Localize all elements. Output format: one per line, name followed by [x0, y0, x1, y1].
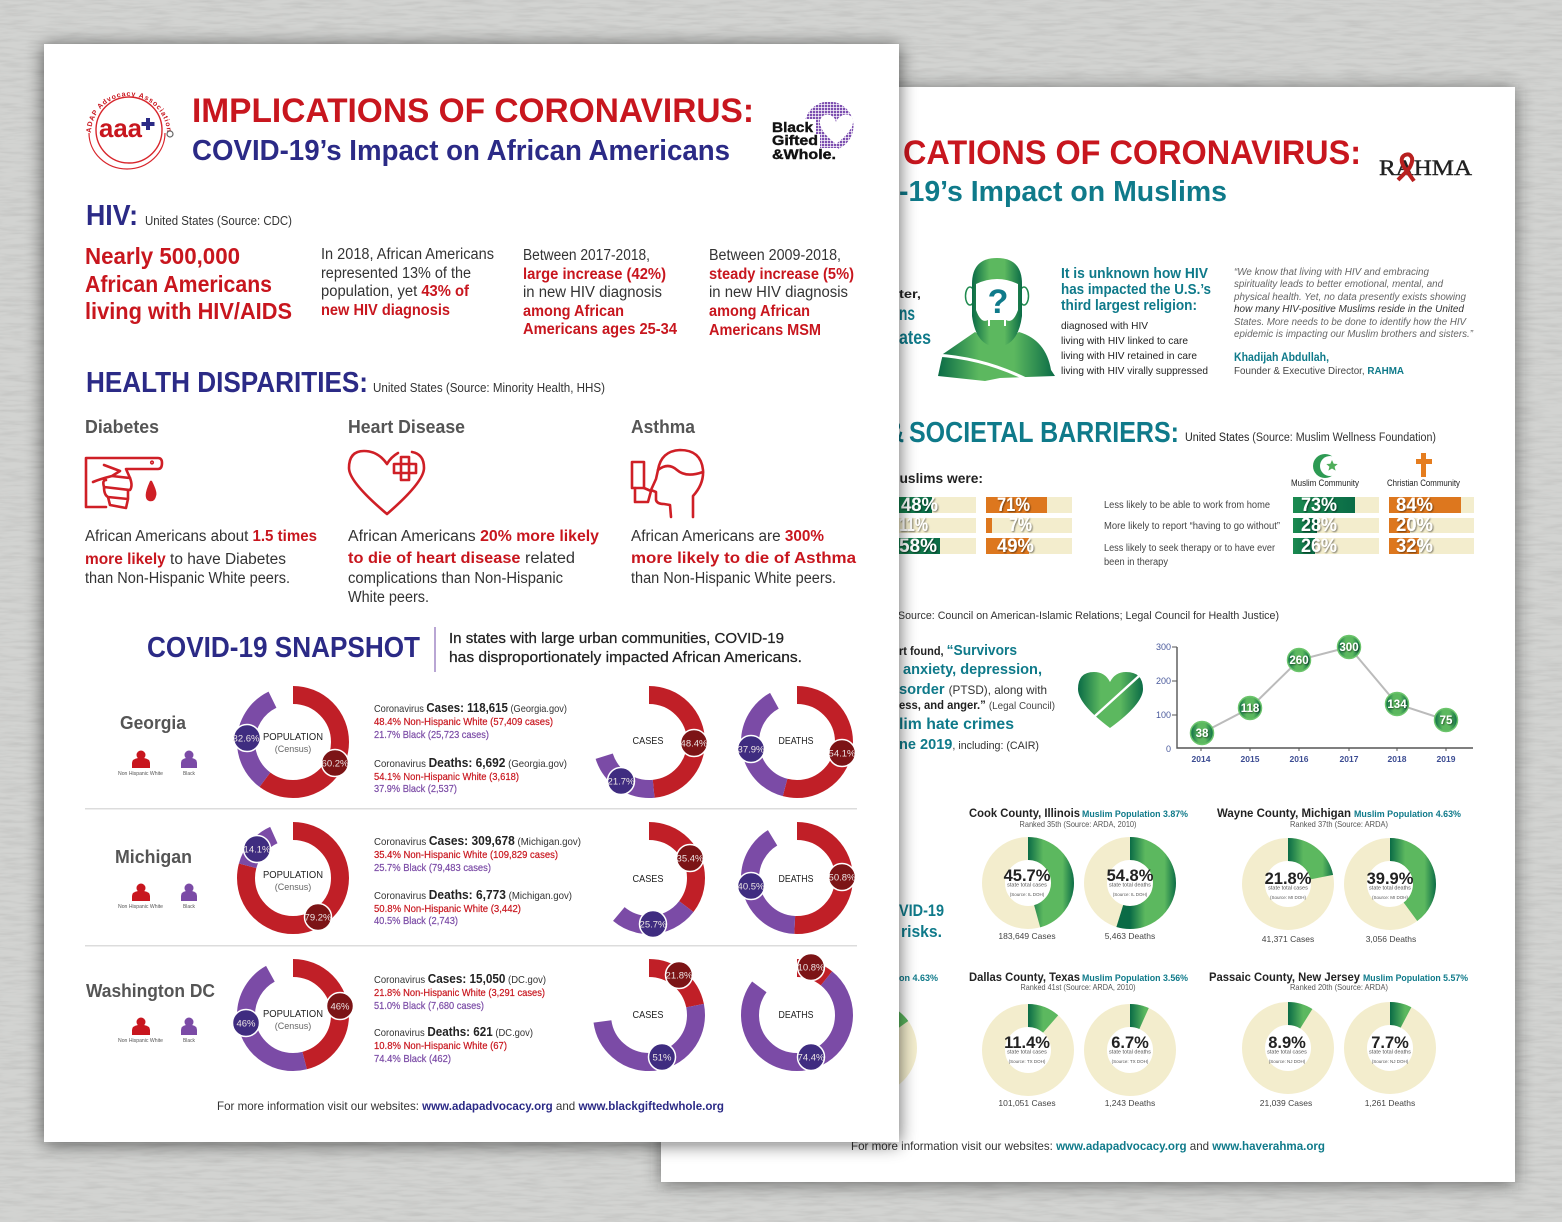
line chart: hate crimes by year: 2015 — [1241, 754, 1260, 764]
donut: deaths 7.7% — [1356, 1014, 1424, 1108]
donut: deaths 54.8%: 54.8% — [1107, 867, 1154, 885]
state name and legend: Black — [183, 904, 195, 910]
text: hate crimes report: lim hate crimes — [899, 716, 1014, 733]
bar labels — [1104, 500, 1280, 568]
line chart: hate crimes by year: 200 — [1156, 676, 1171, 686]
panel: heart disease — [348, 417, 599, 606]
bar chart: Muslim and Christian community bars: 20% — [1396, 515, 1433, 536]
line chart: hate crimes by year — [1156, 636, 1473, 764]
donut: deaths 54.8%: state total deaths — [1109, 882, 1151, 888]
county panel: Cook County, Illinois: Muslim Population 3.87% — [1082, 809, 1189, 820]
donut: deaths: 10.8% — [798, 962, 825, 974]
donut: cases — [602, 695, 708, 794]
icon: person with question mark: ? — [988, 283, 1008, 321]
state name and legend: Non Hispanic White — [118, 904, 163, 910]
text: large increase: Between 2017-2018, — [523, 247, 650, 264]
donut: cases 11.4%: 11.4% — [1004, 1034, 1050, 1052]
heading: HIV: United States (Source: CDC) — [145, 214, 292, 228]
county panel: Dallas County, Texas: Dallas County, Texas — [969, 970, 1080, 984]
text: steady increase: among African — [709, 303, 810, 320]
donut: cases 21.8%: state total cases — [1268, 886, 1308, 892]
logo: ADAP Advocacy Association: aaa — [99, 113, 143, 143]
panel: heart disease: to die of heart disease related — [348, 550, 575, 567]
line chart: hate crimes by year: 2018 — [1388, 754, 1407, 764]
back page footer: For more information visit our websites: www.adapadvocacy.org and www.haverahma.org — [851, 1139, 1325, 1153]
stats text: 51.0% Black (7,680 cases) — [374, 1000, 484, 1012]
quote attribution — [1234, 350, 1404, 377]
county panel: Passaic County, New Jersey: Passaic County, New Jersey — [1209, 970, 1360, 984]
panel: diabetes: more likely to have Diabetes — [85, 551, 286, 568]
heading: COVID-19 snapshot: In states with large urban communities, COVID-19 — [449, 631, 784, 647]
county panel: Dallas County, Texas — [969, 970, 1189, 1108]
subheading: Muslims were: Muslims were: — [888, 470, 983, 486]
text: hate crimes report: ess, and anger.” (Legal Council) — [899, 698, 1055, 712]
text: unknown impact list: diagnosed with HIV — [1061, 320, 1148, 332]
donut: cases 11.4%: 101,051 Cases — [998, 1098, 1056, 1108]
county panel: Passaic County, New Jersey — [1209, 970, 1468, 1108]
panel: heart disease: complications than Non-Hispanic — [348, 570, 563, 587]
logo: Black Gifted & Whole — [770, 102, 854, 162]
text: steady increase — [709, 247, 854, 339]
donut: cases 45.7%: (Source: IL DOH) — [1010, 892, 1045, 897]
bar labels: been in therapy — [1104, 557, 1168, 568]
text fragment: COVID-19 risks: risks. — [901, 922, 942, 941]
bar chart: left comparison bars: 11% — [899, 515, 928, 536]
donut: cases 11.4%: state total cases — [1007, 1050, 1047, 1056]
text fragment: left column: ns — [899, 304, 915, 325]
quote block: “We know that living with HIV and embracing — [1234, 267, 1429, 278]
donut: deaths: DEATHS — [778, 874, 814, 885]
text: unknown impact list: living with HIV linked to care — [1061, 335, 1188, 347]
text: hate crimes report: sorder (PTSD), along with — [899, 681, 1047, 698]
logo: Black Gifted & Whole: Gifted — [772, 132, 818, 148]
donut: cases 8.9%: 21,039 Cases — [1260, 1098, 1312, 1108]
donut: population — [244, 831, 340, 930]
stats text: 54.1% Non-Hispanic White (3,618) — [374, 771, 519, 783]
text: unknown impact list: third largest religion: — [1061, 297, 1197, 314]
stats text — [374, 700, 567, 795]
donut: cases: CASES — [632, 1010, 664, 1021]
bar chart: Muslim and Christian community bars — [1293, 495, 1474, 557]
text: steady increase: Between 2009-2018, — [709, 247, 841, 264]
text: steady increase: in new HIV diagnosis — [709, 284, 848, 301]
icon: finger prick and blood drop — [86, 458, 162, 508]
panel: diabetes — [85, 417, 317, 587]
county panel: Passaic County, New Jersey: Ranked 20th (Source: ARDA) — [1290, 982, 1388, 992]
line chart: hate crimes by year: 300 — [1339, 642, 1359, 654]
state name and legend: Michigan — [115, 847, 192, 867]
stats text: Coronavirus Cases: 118,615 (Georgia.gov) — [374, 700, 567, 715]
bar labels: Less likely to be able to work from home — [1104, 500, 1270, 511]
icon: crescent and star, Muslim community: Muslim Community — [1291, 478, 1359, 489]
donut: cases 8.9%: state total cases — [1267, 1050, 1307, 1056]
partial county donut — [836, 973, 939, 1082]
logo: Black Gifted & Whole: &Whole. — [772, 146, 836, 162]
icon: broken green heart — [1078, 672, 1143, 728]
state name and legend: Georgia — [120, 713, 187, 733]
donut: deaths 6.7% — [1096, 1016, 1164, 1108]
stat: nearly 500,000: Nearly 500,000 — [85, 243, 240, 269]
donut: deaths — [738, 695, 856, 789]
text: large increase — [523, 247, 677, 338]
icon: heart with medical cross — [349, 451, 424, 514]
donut: deaths 39.9%: state total deaths — [1369, 886, 1411, 892]
logo: ADAP Advocacy Association — [86, 92, 174, 170]
panel: asthma: than Non-Hispanic White peers. — [631, 570, 836, 587]
donut: cases — [602, 831, 704, 938]
row: Michigan — [115, 831, 856, 938]
panel: asthma: Asthma — [631, 417, 696, 437]
panel: heart disease: African Americans 20% more likely — [348, 528, 599, 545]
donut: cases 21.8%: 21.8% — [1265, 870, 1312, 888]
heading: COVID-19 snapshot — [147, 627, 802, 672]
logo: Black Gifted & Whole: Black — [772, 119, 813, 135]
stats text: 48.4% Non-Hispanic White (57,409 cases) — [374, 716, 553, 728]
quote block: spirituality leads to better emotional, mental, and — [1234, 279, 1443, 290]
icon: cross, Christian community: Christian Community — [1387, 478, 1460, 489]
bar chart: Muslim and Christian community bars: 73% — [1301, 495, 1337, 516]
text: hate crimes report: anxiety, depression, — [903, 661, 1042, 678]
quote block: States. More needs to be done to identify how the HIV — [1234, 317, 1467, 328]
stats text: 35.4% Non-Hispanic White (109,829 cases) — [374, 849, 558, 861]
text fragment: COVID-19 risks: VID-19 — [899, 901, 944, 920]
panel: diabetes: than Non-Hispanic White peers. — [85, 570, 290, 587]
stats text: Coronavirus Deaths: 621 (DC.gov) — [374, 1024, 533, 1039]
bar chart: left comparison bars: 48% — [901, 495, 938, 516]
quote block — [1233, 267, 1474, 340]
text: unknown impact list: has impacted the U.S.’s — [1061, 281, 1211, 298]
heading: health disparities — [86, 367, 605, 399]
quote block: how many HIV-positive Muslims reside in the United — [1234, 304, 1464, 315]
donut: cases: 21.7% — [608, 776, 635, 788]
county panel: Wayne County, Michigan — [1217, 806, 1462, 944]
back title: -19’s Impact on Muslims — [899, 176, 1227, 208]
panel: heart disease: Heart Disease — [348, 417, 465, 437]
stats text: 25.7% Black (79,483 cases) — [374, 862, 491, 874]
donut: deaths: DEATHS — [778, 736, 814, 747]
donut: cases 8.9% — [1254, 1014, 1322, 1108]
stats text: Coronavirus Cases: 309,678 (Michigan.gov) — [374, 833, 581, 848]
heading: societal barriers — [889, 417, 1436, 449]
donut: population: (Census) — [275, 744, 311, 754]
donut: population: POPULATION — [263, 870, 323, 881]
text: 13% of population: new HIV diagnosis — [321, 302, 450, 319]
stats text: 21.7% Black (25,723 cases) — [374, 729, 489, 741]
stats text: Coronavirus Deaths: 6,773 (Michigan.gov) — [374, 887, 572, 902]
line chart: hate crimes by year: 300 — [1156, 642, 1171, 652]
donut: population: 79.2% — [305, 912, 332, 924]
front page footer: For more information visit our websites: www.adapadvocacy.org and www.blackgiftedwhole.org — [217, 1099, 724, 1113]
text: large increase: among African — [523, 303, 624, 320]
text: unknown impact list: living with HIV virally suppressed — [1061, 365, 1208, 377]
heading: COVID-19 snapshot: has disproportionately impacted African Americans. — [449, 650, 802, 666]
bar chart: left comparison bars — [880, 495, 1072, 557]
donut: cases: CASES — [632, 874, 664, 885]
donut: deaths: DEATHS — [778, 1010, 814, 1021]
county panel: Wayne County, Michigan: Wayne County, Michigan — [1217, 806, 1351, 820]
text: 13% of population — [321, 246, 494, 319]
quote block: epidemic is impacting our Muslim brothers and sisters.” — [1234, 329, 1474, 340]
donut: cases: 25.7% — [640, 920, 667, 930]
donut: deaths 7.7%: 1,261 Deaths — [1365, 1098, 1415, 1108]
state name and legend: Black — [183, 1038, 195, 1044]
donut: population: 60.2% — [322, 758, 349, 770]
line chart: hate crimes by year: 0 — [1166, 744, 1171, 754]
quote block: physical health. Yet, no data presently exists showing — [1233, 292, 1466, 303]
donut: population: 46% — [236, 1018, 256, 1030]
donut: deaths 54.8%: 5,463 Deaths — [1105, 931, 1155, 941]
donut: cases: 35.4% — [677, 854, 704, 864]
line chart: hate crimes by year: 2014 — [1192, 754, 1211, 764]
county panel: Cook County, Illinois: Cook County, Illinois — [969, 806, 1080, 820]
stats text: 37.9% Black (2,537) — [374, 783, 457, 795]
panel: asthma — [631, 417, 856, 587]
bar chart: Muslim and Christian community bars: 28% — [1301, 515, 1337, 536]
stats text: 10.8% Non-Hispanic White (67) — [374, 1040, 507, 1052]
heading: societal barriers: & — [889, 417, 904, 449]
text: steady increase: steady increase (5%) — [709, 266, 854, 283]
panel: back page, impact on Muslims — [661, 87, 1515, 1184]
county panel: Dallas County, Texas: Muslim Population 3.56% — [1082, 973, 1189, 984]
donut: deaths 39.9%: 3,056 Deaths — [1366, 934, 1416, 944]
bar chart: left comparison bars: 58% — [899, 536, 937, 557]
donut: population — [232, 968, 354, 1062]
donut: cases: CASES — [632, 736, 664, 747]
donut: cases 45.7% — [994, 848, 1062, 941]
title: COVID-19’s Impact on African Americans — [192, 135, 730, 167]
donut: deaths: 74.4% — [798, 1052, 825, 1064]
text: large increase: in new HIV diagnosis — [523, 284, 662, 301]
text fragment: left column — [899, 289, 931, 349]
heading: societal barriers: United States (Source: Muslim Wellness Foundation) — [1185, 432, 1436, 444]
state name and legend — [86, 981, 215, 1044]
text: large increase: Americans ages 25-34 — [523, 321, 677, 338]
donut: cases 45.7%: state total cases — [1007, 882, 1047, 888]
logo: ADAP Advocacy Association: ADAP Advocacy Association — [86, 92, 171, 133]
donut: cases 21.8%: (Source: MI DOH) — [1270, 895, 1306, 900]
donut: cases 11.4% — [994, 1016, 1062, 1108]
donut: cases — [602, 962, 696, 1070]
donut: cases 21.8%: 41,371 Cases — [1262, 934, 1314, 944]
back title: CATIONS OF CORONAVIRUS: — [903, 134, 1361, 172]
donut: population: 46% — [330, 1002, 350, 1012]
stat: nearly 500,000 — [85, 243, 292, 324]
donut: deaths 54.8%: (Source: IL DOH) — [1113, 892, 1148, 897]
bar chart: Muslim and Christian community bars: 26% — [1301, 536, 1337, 557]
donut: deaths 6.7%: 6.7% — [1111, 1034, 1149, 1052]
line chart: hate crimes by year: 2019 — [1437, 754, 1456, 764]
heading: HIV: HIV: — [86, 200, 138, 232]
donut: cases 8.9%: (Source: NJ DOH) — [1269, 1059, 1306, 1064]
heading: HIV — [86, 200, 292, 232]
bar labels: Less likely to seek therapy or to have ever — [1104, 543, 1276, 554]
panel: asthma: African Americans are 300% — [631, 528, 824, 545]
county panel: Cook County, Illinois: Ranked 35th (Source: ARDA, 2010) — [1020, 819, 1137, 829]
donut: cases: 48.4% — [681, 738, 708, 750]
donut: population: 32.6% — [233, 734, 260, 744]
donut: cases 11.4%: (Source: TX DOH) — [1009, 1059, 1046, 1064]
donut: population: (Census) — [275, 1021, 311, 1031]
donut: deaths: 50.8% — [829, 872, 856, 884]
partial county donut: on 4.63% — [899, 973, 939, 984]
text: 13% of population: In 2018, African Americans — [321, 246, 494, 263]
donut: deaths — [750, 954, 844, 1070]
heading: health disparities: HEALTH DISPARITIES: — [86, 367, 368, 399]
panel: diabetes: Diabetes — [85, 417, 159, 437]
stats text: Coronavirus Cases: 15,050 (DC.gov) — [374, 971, 546, 986]
line chart: hate crimes by year: 134 — [1387, 699, 1407, 711]
donut: deaths — [738, 831, 856, 925]
bar chart: left comparison bars: 7% — [1009, 515, 1032, 536]
bar chart: left comparison bars: 71% — [997, 495, 1030, 516]
line chart: hate crimes by year: 75 — [1440, 715, 1453, 727]
donut: deaths: 40.5% — [738, 882, 765, 892]
donut: cases: 21.8% — [666, 970, 693, 982]
county panel: Dallas County, Texas: Ranked 41st (Source: ARDA, 2010) — [1020, 982, 1136, 992]
state name and legend — [118, 713, 197, 777]
donut: cases: 51% — [652, 1052, 672, 1064]
heading: societal barriers: SOCIETAL BARRIERS: — [909, 417, 1179, 449]
donut: deaths 39.9%: (Source: MI DOH) — [1372, 895, 1408, 900]
line chart: hate crimes by year: 100 — [1156, 710, 1171, 720]
county panel: Passaic County, New Jersey: Muslim Population 5.57% — [1363, 973, 1468, 984]
heading: COVID-19 snapshot: COVID-19 SNAPSHOT — [147, 632, 420, 664]
heading: health disparities: United States (Source: Minority Health, HHS) — [373, 381, 605, 395]
back title — [899, 134, 1361, 208]
state name and legend — [115, 847, 197, 910]
bar chart: left comparison bars: 49% — [997, 536, 1034, 557]
state name and legend: Black — [183, 771, 195, 777]
text fragment: COVID-19 risks — [899, 901, 944, 941]
county panel: Cook County, Illinois — [969, 806, 1189, 941]
panel: heart disease: White peers. — [348, 589, 429, 606]
donut: population: (Census) — [275, 882, 311, 892]
donut: deaths 39.9% — [1356, 850, 1424, 944]
stats text: 74.4% Black (462) — [374, 1053, 451, 1065]
donut: cases 8.9%: 8.9% — [1268, 1034, 1306, 1052]
line chart: hate crimes by year: 38 — [1196, 728, 1209, 740]
donut: population: POPULATION — [263, 1009, 323, 1020]
line chart: hate crimes by year: 118 — [1241, 703, 1260, 715]
row: Georgia — [118, 695, 856, 795]
bar labels: More likely to report “having to go without” — [1104, 521, 1280, 532]
donut: deaths 6.7%: 1,243 Deaths — [1105, 1098, 1155, 1108]
text: steady increase: Americans MSM — [709, 322, 821, 339]
stats text: 40.5% Black (2,743) — [374, 915, 458, 927]
logo: RAHMA: RAHMA — [1379, 155, 1472, 180]
donut: cases 21.8% — [1254, 850, 1322, 944]
text fragment: left column: ter, — [899, 289, 921, 301]
text: hate crimes report: ne 2019, including: (CAIR) — [899, 736, 1039, 753]
text fragment: left column: ates — [899, 328, 931, 349]
text: unknown impact list — [1061, 265, 1211, 377]
donut: deaths: 54.1% — [829, 748, 856, 760]
text: large increase: large increase (42%) — [523, 266, 666, 283]
bar chart: Muslim and Christian community bars: 32% — [1396, 536, 1433, 557]
text: hate crimes report: rt found, “Survivors — [899, 642, 1017, 659]
state name and legend: Non Hispanic White — [118, 1038, 163, 1044]
bar chart: Muslim and Christian community bars: 84% — [1396, 495, 1433, 516]
panel: front page, impact on African Americans — [31, 33, 912, 1158]
quote attribution: Founder & Executive Director, RAHMA — [1234, 365, 1404, 377]
donut: deaths 7.7%: state total deaths — [1369, 1050, 1411, 1056]
line chart: hate crimes by year: 260 — [1289, 655, 1309, 667]
donut: population: 14.1% — [244, 844, 271, 856]
panel: asthma: more likely to die of Asthma — [631, 550, 856, 567]
source line: Source: Council on American-Islamic Relations; Legal Council for Health Justice) — [898, 610, 1279, 622]
line chart: hate crimes by year: 2017 — [1340, 754, 1359, 764]
text: 13% of population: represented 13% of the — [321, 265, 471, 282]
title: IMPLICATIONS OF CORONAVIRUS: — [192, 92, 754, 130]
panel: diabetes: African Americans about 1.5 times — [85, 528, 317, 545]
icon: inhaler and head — [632, 450, 703, 517]
donut: population: POPULATION — [263, 732, 323, 743]
stats text: 50.8% Non-Hispanic White (3,442) — [374, 903, 521, 915]
donut: deaths 54.8% — [1096, 848, 1164, 941]
stats text — [374, 971, 546, 1065]
icon: person with question mark — [936, 258, 1055, 381]
county panel: Wayne County, Michigan: Ranked 37th (Source: ARDA) — [1290, 819, 1388, 829]
quote attribution: Khadijah Abdullah, — [1234, 350, 1329, 364]
donut: cases 45.7%: 183,649 Cases — [998, 931, 1056, 941]
title — [192, 92, 754, 167]
stat: nearly 500,000: living with HIV/AIDS — [85, 298, 292, 324]
donut: population — [233, 695, 349, 789]
donut: cases 45.7%: 45.7% — [1004, 867, 1051, 885]
text: unknown impact list: living with HIV retained in care — [1061, 350, 1197, 362]
stats text: Coronavirus Deaths: 6,692 (Georgia.gov) — [374, 755, 567, 770]
stats text: 21.8% Non-Hispanic White (3,291 cases) — [374, 987, 545, 999]
text: 13% of population: population, yet 43% of — [321, 283, 470, 300]
row: Washington DC — [86, 954, 844, 1070]
county panel: Wayne County, Michigan: Muslim Population 4.63% — [1354, 809, 1462, 820]
line chart: hate crimes by year: 2016 — [1290, 754, 1309, 764]
donut: deaths 6.7%: state total deaths — [1109, 1050, 1151, 1056]
icon: cross, Christian community — [1387, 453, 1460, 489]
icon: crescent and star, Muslim community — [1291, 454, 1359, 489]
donut: deaths: 37.9% — [738, 744, 765, 756]
text: hate crimes report — [899, 642, 1055, 753]
text: unknown impact list: It is unknown how HIV — [1061, 265, 1208, 282]
donut: deaths 6.7%: (Source: TX DOH) — [1112, 1059, 1149, 1064]
donut: deaths 7.7%: 7.7% — [1371, 1034, 1409, 1052]
state name and legend: Washington DC — [86, 981, 215, 1001]
donut: deaths 39.9%: 39.9% — [1367, 870, 1414, 888]
donut: deaths 7.7%: (Source: NJ DOH) — [1372, 1059, 1409, 1064]
state name and legend: Non Hispanic White — [118, 771, 163, 777]
stats text — [374, 833, 581, 927]
stat: nearly 500,000: African Americans — [85, 271, 272, 297]
